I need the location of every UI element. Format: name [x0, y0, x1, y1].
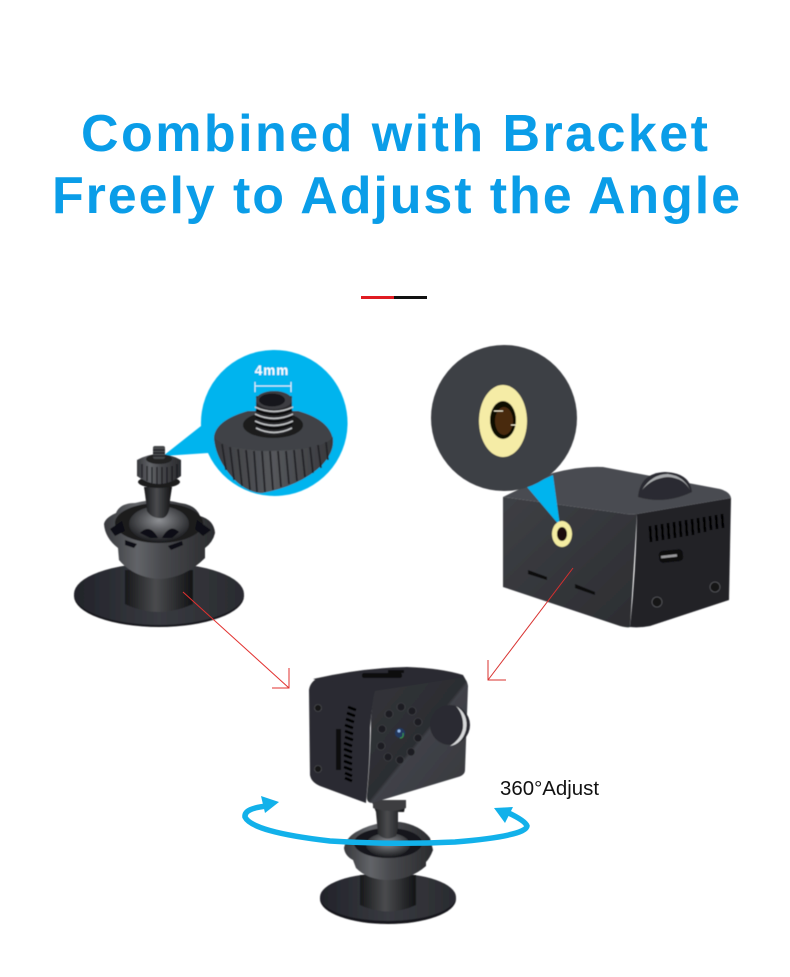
assembled knob — [344, 822, 433, 880]
callout: dark magnifier circle — [431, 345, 577, 491]
camera side face — [630, 498, 731, 627]
bracket neck — [125, 570, 193, 612]
assembled base disc — [320, 873, 456, 924]
camera side screws — [314, 704, 322, 772]
panel: bracket with 4mm screw — [74, 350, 348, 627]
panel: assembled camera on bracket — [309, 667, 470, 924]
camera top face — [503, 467, 731, 514]
threaded hole — [552, 521, 572, 547]
bracket locking knob — [104, 500, 215, 579]
camera card slot — [336, 729, 341, 770]
callout pointer — [527, 475, 560, 526]
divider: red and black accent line — [361, 296, 427, 299]
arrow: bracket to camera — [183, 592, 289, 688]
dimension marker: 4mm — [255, 363, 291, 392]
label: 360 degree adjust: 360°Adjust — [500, 778, 599, 800]
arrow: back mount to camera — [488, 568, 573, 680]
zoomed thumb nut — [214, 391, 333, 493]
camera side vents — [344, 707, 356, 781]
assembled neck — [360, 875, 416, 912]
screws — [652, 582, 720, 607]
camera front face — [503, 497, 637, 627]
camera face — [367, 678, 468, 803]
camera side — [309, 678, 375, 803]
side vents — [650, 514, 723, 542]
camera lens — [395, 728, 405, 738]
small thumb nut — [137, 446, 181, 488]
camera PIR dome — [638, 472, 692, 500]
panel: camera back with threaded mount — [431, 345, 731, 627]
infrared LED ring — [377, 703, 422, 764]
assembled stem and nut — [372, 800, 406, 839]
camera top — [313, 667, 467, 694]
bracket base disc — [74, 563, 244, 627]
camera PIR window — [430, 705, 470, 746]
callout: blue magnifier circle — [163, 350, 348, 496]
bracket stem — [144, 487, 172, 518]
rotation arrow ring — [245, 796, 527, 843]
dimension marker: 4mm: 4mm — [255, 363, 289, 378]
title: Freely to Adjust the Angle — [52, 167, 740, 225]
USB port — [658, 549, 684, 563]
title: Combined with Bracket — [81, 105, 708, 163]
title — [52, 105, 740, 225]
front card slots — [528, 570, 595, 595]
